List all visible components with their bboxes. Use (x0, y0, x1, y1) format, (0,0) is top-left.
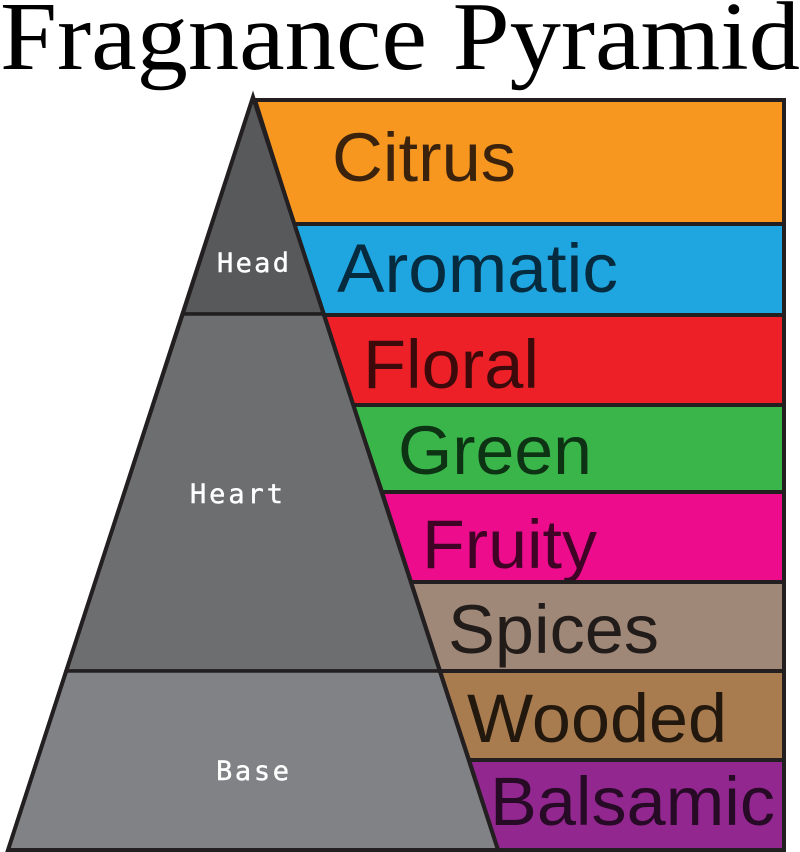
bar: Floral: Floral (363, 326, 539, 403)
bar: Wooded: Wooded (467, 680, 727, 757)
tier: Head (183, 97, 324, 314)
bar: Wooded (440, 671, 784, 760)
pyramid (8, 97, 498, 850)
bar: Fruity (382, 492, 784, 583)
pyramid outline (8, 97, 498, 850)
bar: Green: Green (398, 412, 592, 489)
bar: Balsamic: Balsamic (490, 763, 775, 840)
bar: Fruity: Fruity (422, 506, 598, 583)
tier: Head: Head (217, 248, 289, 279)
bar: Spices: Spices (448, 591, 659, 668)
tier: Base (8, 671, 498, 850)
bar: Citrus: Citrus (332, 119, 516, 196)
tier: Heart (66, 314, 440, 671)
bar: Citrus (255, 100, 784, 224)
panel: category bars (255, 100, 784, 850)
bar: Aromatic (294, 224, 784, 315)
bar: Floral (324, 315, 784, 405)
bar: Spices (411, 582, 784, 671)
bar: Aromatic: Aromatic (337, 230, 618, 307)
tier: Base: Base (216, 756, 289, 787)
bar: Green (353, 405, 784, 492)
tier: Heart: Heart (190, 479, 283, 510)
